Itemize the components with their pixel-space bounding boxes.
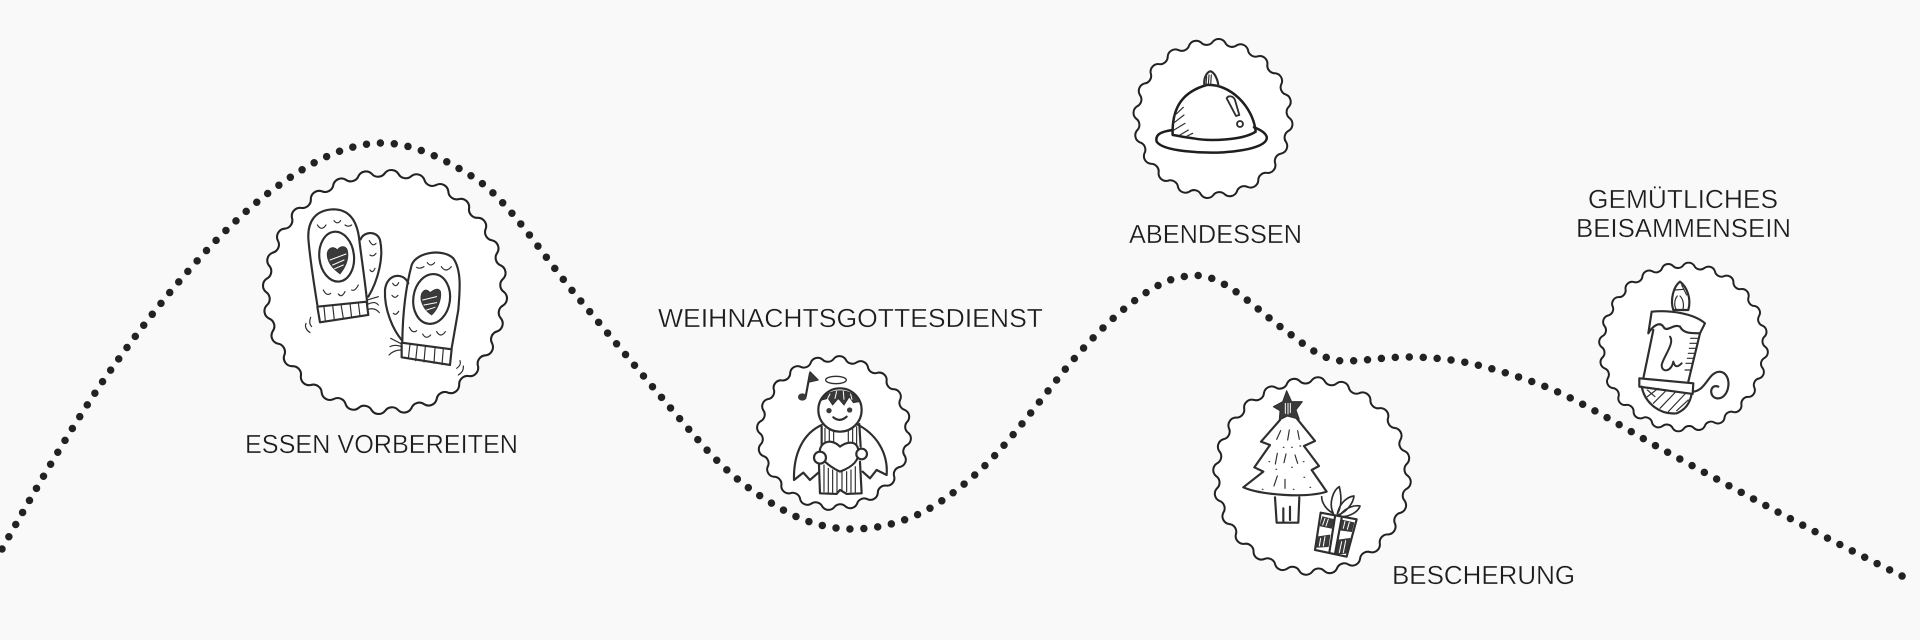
- badge: singing angel: [757, 356, 911, 510]
- badge: mittens: [263, 170, 507, 414]
- badge: candle: [1599, 263, 1768, 431]
- icon: tree and gift: [1243, 391, 1360, 557]
- scalloped ring: angel: [757, 356, 911, 510]
- label: gemütliches beisammensein: GEMÜTLICHES: [1588, 184, 1778, 214]
- badge: dinner cloche: [1134, 39, 1292, 198]
- label: weihnachtsgottesdienst: WEIHNACHTSGOTTESDIENST: [658, 303, 1043, 333]
- scalloped ring: candle: [1599, 263, 1768, 431]
- icon: mittens: [305, 209, 463, 375]
- label: bescherung: BESCHERUNG: [1392, 560, 1575, 590]
- icon: candle: [1639, 282, 1728, 413]
- badge: christmas tree and gift: [1213, 377, 1411, 575]
- label: gemütliches beisammensein: BEISAMMENSEIN: [1576, 213, 1791, 243]
- label: essen vorbereiten: ESSEN VORBEREITEN: [245, 429, 518, 459]
- scalloped ring: mittens: [263, 170, 507, 414]
- label: abendessen: ABENDESSEN: [1129, 219, 1302, 249]
- icon: angel: [794, 372, 887, 494]
- label: gemütliches beisammensein: [1576, 184, 1791, 243]
- icon: cloche: [1156, 71, 1267, 153]
- scalloped ring: cloche: [1134, 39, 1292, 198]
- dotted timeline curve: [2, 143, 1904, 577]
- scalloped ring: tree: [1213, 377, 1411, 575]
